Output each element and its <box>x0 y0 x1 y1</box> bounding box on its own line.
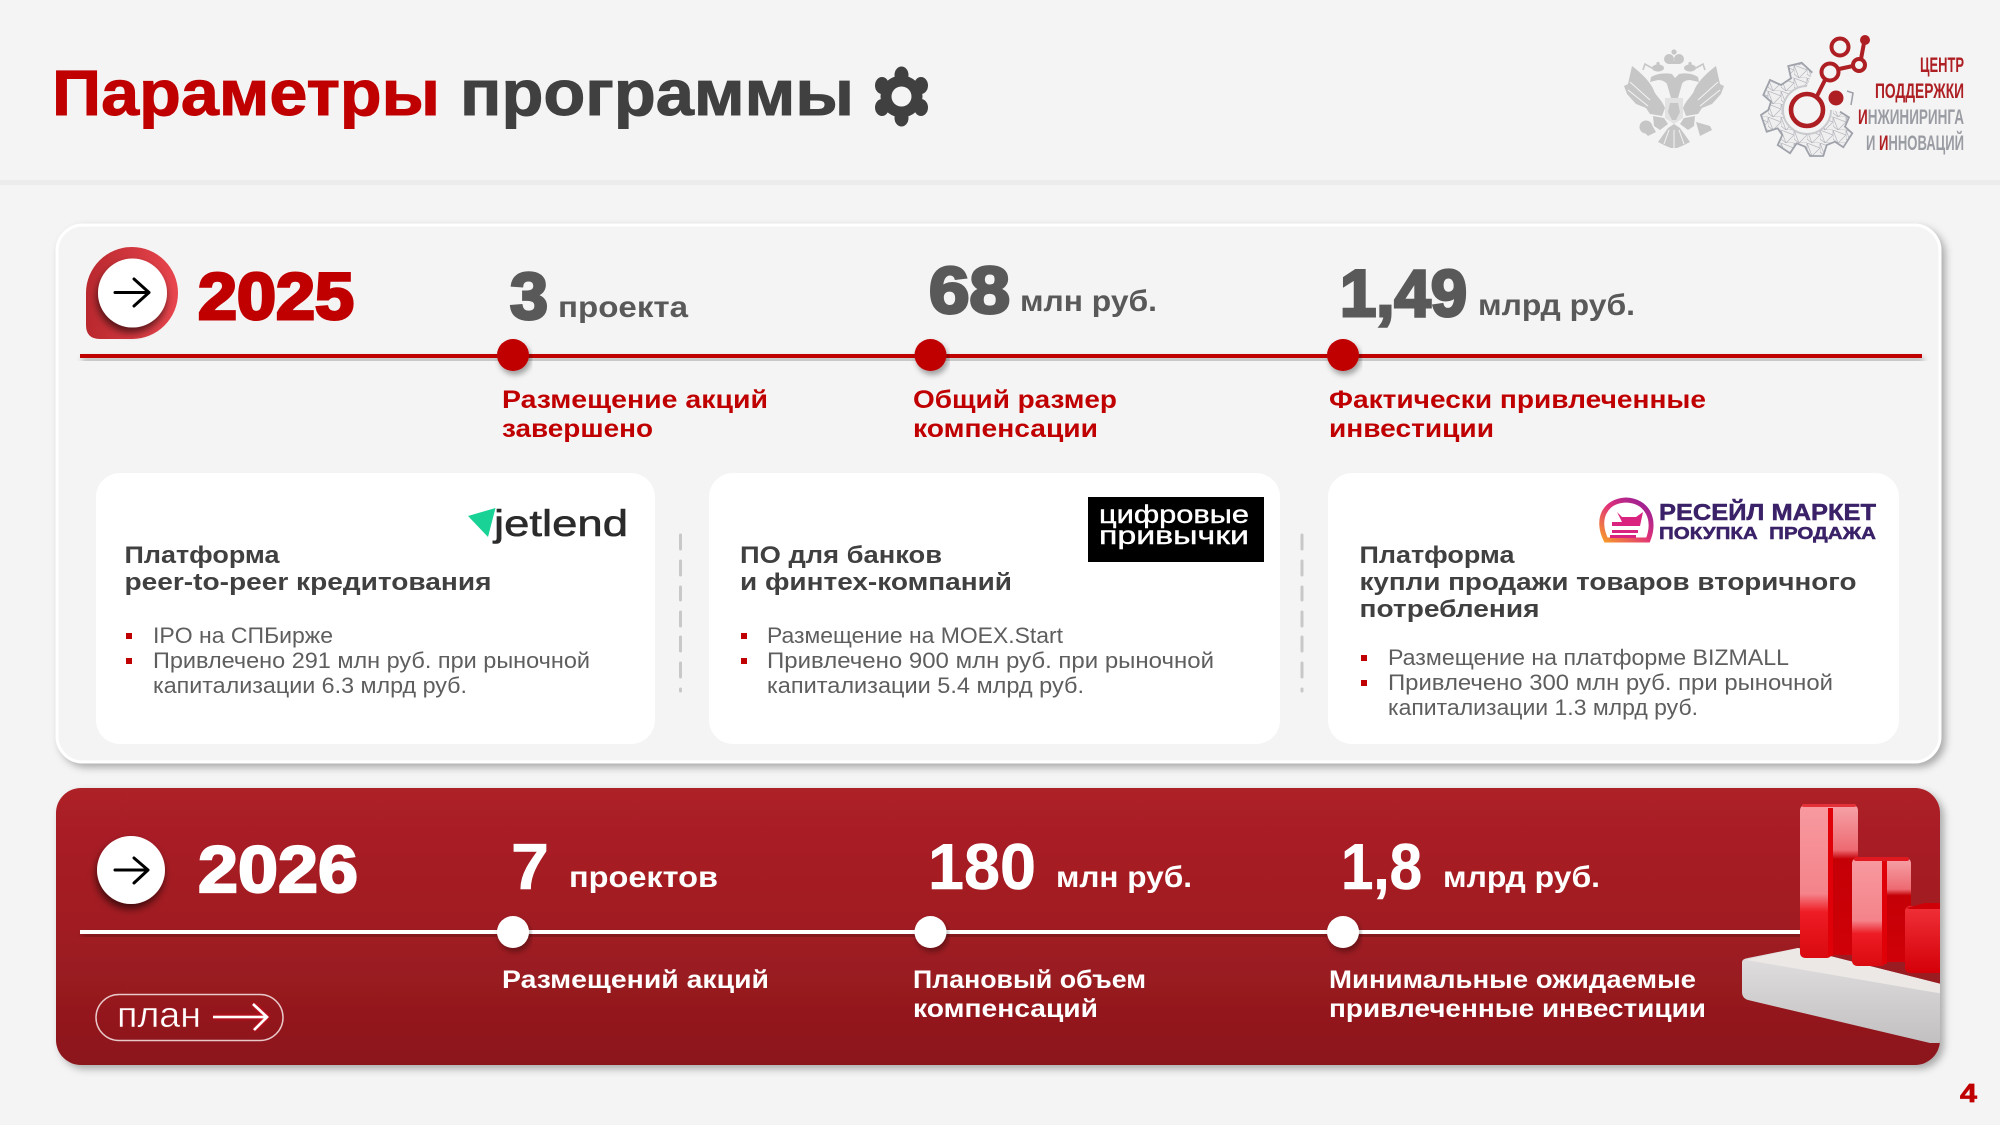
metric: 3 projects: Размещение акций <box>502 386 768 414</box>
metric: 1,8 bln: 1,8 <box>1341 830 1422 903</box>
metric: 1,49 bln: 1,49 <box>1340 256 1467 330</box>
metric: 1,49 bln <box>1327 256 1706 443</box>
icon: 2026 arrow <box>97 836 165 904</box>
logo: digital habits <box>1088 497 1264 562</box>
metric: 7 projects: проектов <box>569 861 718 894</box>
bar 2 <box>1852 857 1911 966</box>
logo: jetlend <box>468 503 628 544</box>
badge: 2025 arrow <box>86 247 178 339</box>
logo: digital habits: цифровые <box>1099 501 1249 529</box>
panel: 2025 <box>57 225 1940 762</box>
bullet list: Размещение на платформе BIZMALL <box>1388 645 1789 670</box>
metric: 1,49 bln: млрд руб. <box>1478 289 1635 322</box>
logo: state emblem <box>1624 49 1724 148</box>
metric: 7 projects: Размещений акций <box>502 966 769 994</box>
year 2025: 2025 <box>198 259 354 333</box>
metric: 180 mln <box>913 830 1192 1023</box>
metric: 3 projects: проекта <box>558 291 688 324</box>
timeline 2025 <box>80 354 1922 358</box>
heading <box>740 542 1012 596</box>
bullet list <box>741 623 1214 698</box>
gear outline <box>1761 63 1853 156</box>
metric: 1,49 bln: инвестиции <box>1329 415 1494 443</box>
logo: jetlend: jetlend <box>493 503 628 544</box>
logo: resale market: РЕСЕЙЛ МАРКЕТ <box>1659 498 1876 525</box>
divider 1 <box>679 535 682 691</box>
icon: gear <box>875 66 928 126</box>
molecule circles <box>1791 35 1870 126</box>
title: программы <box>460 57 854 129</box>
metric: 1,8 bln <box>1327 830 1706 1023</box>
bullet list <box>1361 645 1833 720</box>
plan pill: план <box>117 994 201 1035</box>
logo: digital habits: привычки <box>1099 522 1249 550</box>
plan pill <box>96 994 283 1040</box>
metric: 68 mln: Общий размер <box>913 386 1117 414</box>
metric: 3 projects: 3 <box>510 259 548 333</box>
metric: 68 mln: 68 <box>929 253 1010 327</box>
bullet list: капитализации 5.4 млрд руб. <box>767 673 1084 698</box>
metric: 3 projects: завершено <box>502 415 653 443</box>
metric: 180 mln: Плановый объем <box>913 966 1146 994</box>
metric: 7 projects: 7 <box>511 830 549 903</box>
bullet list: Привлечено 300 млн руб. при рыночной <box>1388 670 1833 695</box>
heading: Платформа <box>124 542 280 569</box>
metric: 68 mln: компенсации <box>913 415 1098 443</box>
title <box>52 57 854 129</box>
bullet list: капитализации 1.3 млрд руб. <box>1388 695 1698 720</box>
metric: 1,8 bln: млрд руб. <box>1443 861 1600 894</box>
divider 2 <box>1300 535 1304 691</box>
title: Параметры <box>52 57 440 129</box>
timeline 2026 <box>80 930 1805 934</box>
bullet list: Размещение на MOEX.Start <box>767 623 1063 648</box>
card: jetlend <box>96 473 655 744</box>
organisation name <box>1858 54 1964 155</box>
metric: 1,49 bln: Фактически привлеченные <box>1329 386 1706 414</box>
metric: 180 mln: млн руб. <box>1056 861 1192 894</box>
metric: 1,8 bln: Минимальные ожидаемые <box>1329 966 1696 994</box>
panel: 2026 <box>56 788 1945 1065</box>
metric: 1,8 bln: привлеченные инвестиции <box>1329 995 1706 1023</box>
heading <box>124 542 492 596</box>
logo: resale market: ПОКУПКА ПРОДАЖА <box>1659 523 1876 543</box>
bullet list: Привлечено 291 млн руб. при рыночной <box>153 648 590 673</box>
heading: и финтех-компаний <box>740 569 1012 596</box>
card: digital habits <box>709 473 1280 744</box>
3D bar chart illustration <box>1742 804 1945 1043</box>
bullet list: Привлечено 900 млн руб. при рыночной <box>767 648 1214 673</box>
metric: 180 mln: 180 <box>928 830 1036 903</box>
heading <box>1360 542 1857 623</box>
metric: 68 mln: млн руб. <box>1020 285 1157 318</box>
header divider <box>0 180 2000 185</box>
metric: 3 projects <box>497 259 768 443</box>
metric: 180 mln: компенсаций <box>913 995 1098 1023</box>
platform <box>1742 948 1945 1043</box>
bullet list <box>126 623 590 698</box>
metric: 68 mln <box>913 253 1157 443</box>
bullet list: капитализации 6.3 млрд руб. <box>153 673 467 698</box>
year 2026: 2026 <box>198 832 358 906</box>
bullet list: IPO на СПБирже <box>153 623 333 648</box>
heading: потребления <box>1360 596 1540 623</box>
page number: 4 <box>1960 1078 1978 1108</box>
heading: peer-to-peer кредитования <box>124 569 492 596</box>
heading: купли продажи товаров вторичного <box>1360 569 1857 596</box>
logo: center for engineering support <box>1761 35 1964 156</box>
heading: ПО для банков <box>740 542 942 569</box>
bar 3 <box>1905 903 1940 973</box>
metric: 7 projects <box>497 830 769 994</box>
organisation name: ЦЕНТР <box>1920 54 1964 77</box>
card: resale market <box>1328 473 1899 744</box>
heading: Платформа <box>1360 542 1515 569</box>
logo: resale market <box>1602 498 1876 543</box>
bar 1 <box>1800 804 1858 958</box>
